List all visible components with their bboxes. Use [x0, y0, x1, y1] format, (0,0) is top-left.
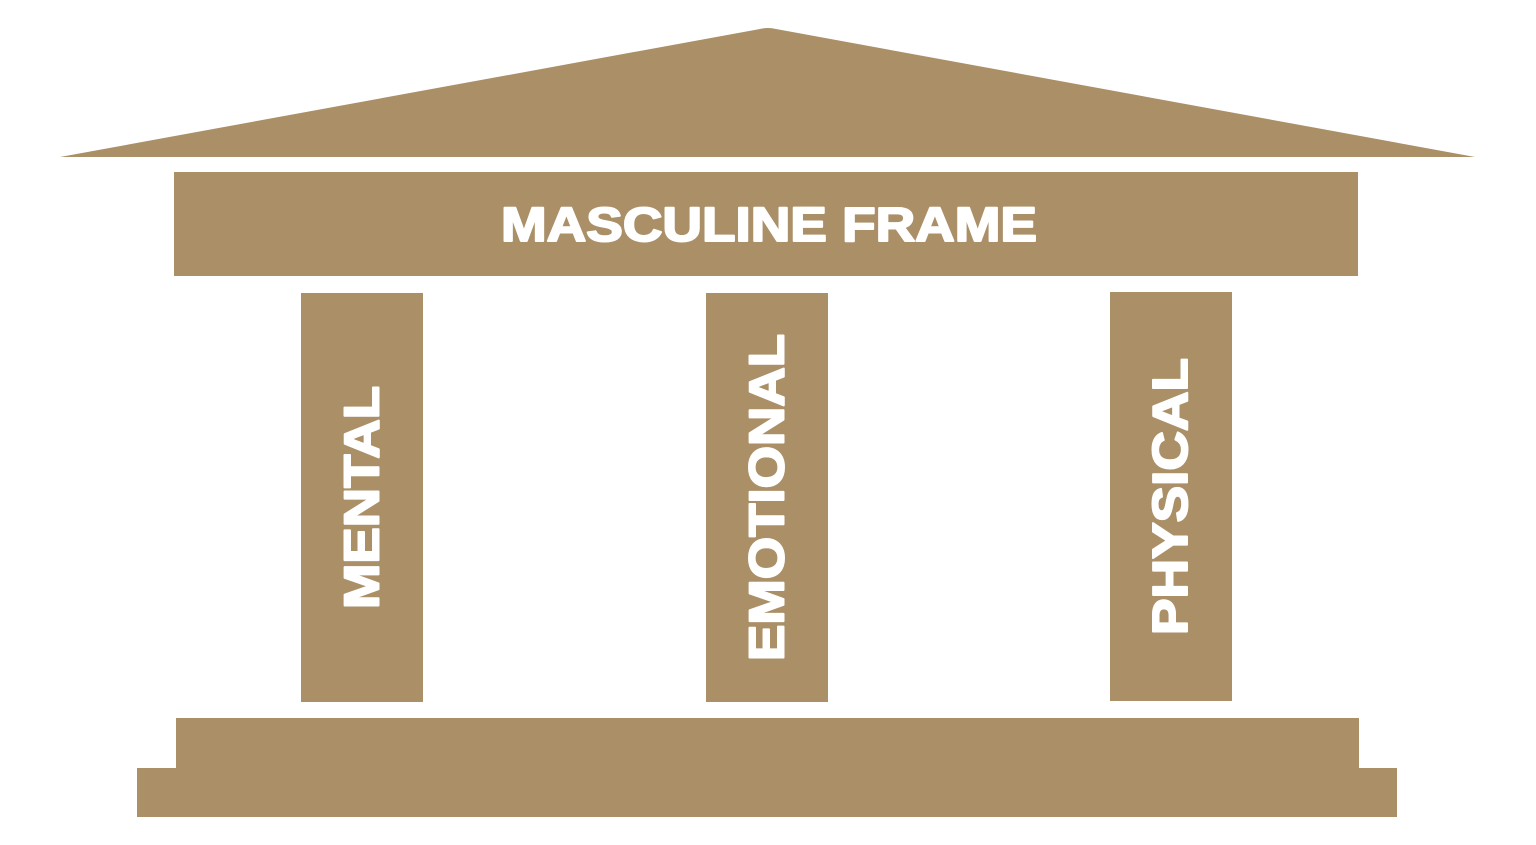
beam: masculine frame [174, 172, 1358, 276]
pillar: mental [301, 293, 423, 702]
pillar: emotional [706, 293, 828, 702]
label: emotional: EMOTIONAL [740, 334, 794, 661]
base steps [137, 718, 1397, 817]
label: physical: PHYSICAL [1144, 358, 1198, 635]
label: mental: MENTAL [336, 386, 390, 609]
pillar: physical [1110, 292, 1232, 701]
heading: masculine frame: MASCULINE FRAME [501, 199, 1037, 252]
roof [60, 28, 1475, 157]
